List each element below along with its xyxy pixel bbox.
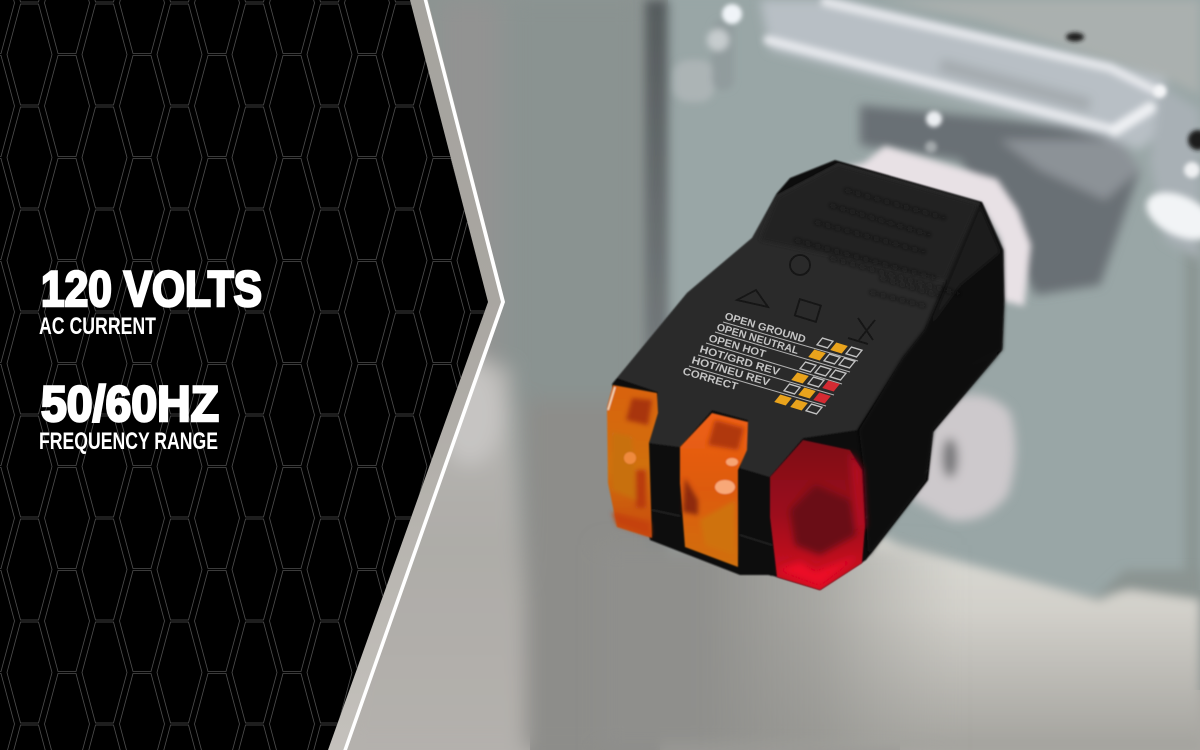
caption: frequency range: FREQUENCY RANGE [39, 428, 218, 455]
label: open hot: OPEN HOT [707, 332, 768, 361]
label: open ground: OPEN GROUND [723, 310, 808, 346]
label: open neutral: OPEN NEUTRAL [715, 321, 801, 357]
heading: 50/60hz: 50/60HZ [41, 376, 219, 432]
embossed product text [795, 190, 960, 306]
indicator chart label [681, 310, 862, 414]
label: correct: CORRECT [681, 365, 740, 393]
spec: 50/60hz [39, 376, 219, 455]
tester device [607, 160, 1004, 590]
panel: black hexagon background [0, 0, 488, 750]
caption: ac current: AC CURRENT [39, 313, 156, 340]
gray band between panel and white line [325, 0, 505, 750]
heading: 120 volts: 120 VOLTS [41, 261, 262, 317]
device body [612, 160, 1004, 590]
photo background: blurred electrical box [347, 0, 1200, 750]
middle amber lens [680, 413, 748, 567]
label: hot/grd rev: HOT/GRD REV [698, 343, 781, 378]
left amber lens [607, 385, 658, 538]
metal rail [760, 0, 1200, 295]
white chevron line [343, 0, 505, 750]
embossed safety icons [737, 255, 875, 344]
red lens [770, 440, 865, 590]
spec: 120 volts [39, 261, 262, 340]
white outlet plate [835, 146, 1031, 306]
label: hot/neu rev: HOT/NEU REV [690, 354, 771, 389]
